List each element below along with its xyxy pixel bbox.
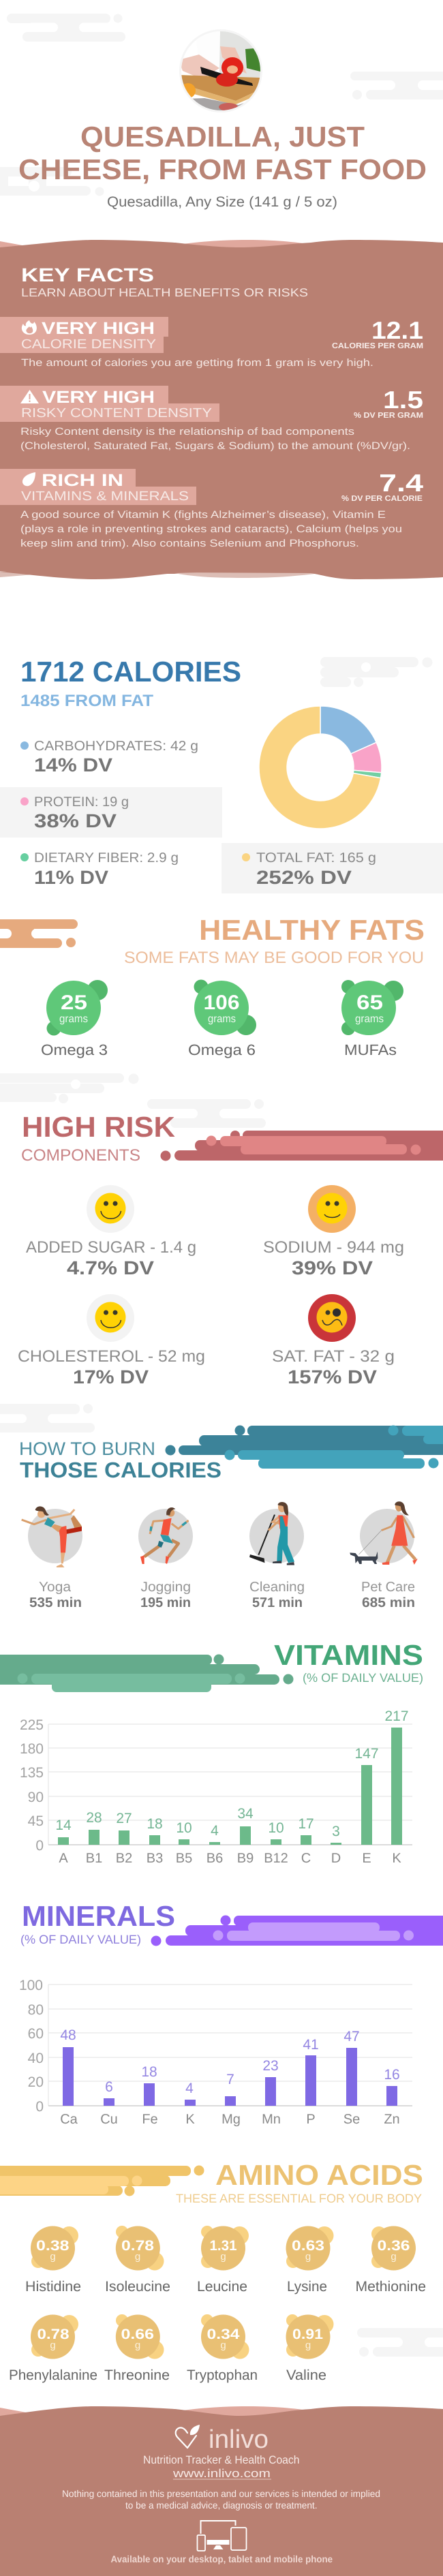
risk: sodium: SODIUM - 944 mg <box>263 1238 404 1257</box>
fat: MUFAs <box>341 980 403 1058</box>
bar chart: minerals: P <box>306 2112 316 2127</box>
amino: valine: Valine <box>286 2367 326 2383</box>
fact: calorie density: VERY HIGH <box>42 319 155 338</box>
bar chart: vitamins: 27 <box>116 1811 132 1826</box>
amino: methionine: Methionine <box>356 2279 426 2295</box>
bar chart: vitamins: 0 <box>35 1838 44 1854</box>
bar chart: vitamins: B6 <box>207 1851 223 1866</box>
panel: key facts <box>0 240 443 579</box>
disclaimer <box>62 2488 380 2511</box>
panel: high risk components <box>18 1111 443 1387</box>
risk: saturated fat <box>272 1294 395 1387</box>
heading: calories: 1712 CALORIES <box>20 656 241 688</box>
risk: added sugar: ADDED SUGAR - 1.4 g <box>26 1238 196 1257</box>
bar chart: minerals: Cu <box>100 2112 118 2127</box>
bar chart: minerals: 4 <box>185 2081 194 2096</box>
amino: isoleucine <box>105 2226 170 2295</box>
fact: rich in vitamins and minerals: % DV PER CALORIE <box>341 495 423 503</box>
amino: leucine: 1.31 <box>210 2238 237 2254</box>
risk: sodium: 39% DV <box>292 1257 373 1278</box>
legend: protein: PROTEIN: 19 g <box>34 795 129 810</box>
activity: yoga: Yoga <box>39 1580 72 1595</box>
fat: MUFAs: MUFAs <box>344 1041 397 1058</box>
heading: high risk: HIGH RISK <box>22 1111 175 1143</box>
heading: vitamins: (% OF DAILY VALUE) <box>303 1671 423 1685</box>
fat: omega 6: grams <box>208 1013 236 1025</box>
fat: MUFAs: grams <box>355 1013 384 1025</box>
bar chart: minerals: 40 <box>28 2051 44 2066</box>
heading: vitamins <box>274 1639 423 1685</box>
bar chart: minerals: 7 <box>226 2072 234 2087</box>
bar chart: minerals: Se <box>343 2112 360 2127</box>
bar chart: minerals: 48 <box>60 2027 76 2043</box>
fact: calorie density: CALORIE DENSITY <box>21 337 156 352</box>
bar chart: vitamins: 14 <box>55 1818 72 1833</box>
activity: yoga: 535 min <box>29 1595 82 1610</box>
risk: saturated fat: 157% DV <box>288 1366 377 1387</box>
bar chart: vitamins: B1 <box>86 1851 102 1866</box>
fact: rich in vitamins and minerals: A good source of Vitamin K (fights Alzheimer’s disease), Vitamin E <box>20 509 386 521</box>
heading: minerals: MINERALS <box>22 1900 175 1932</box>
fact: calorie density <box>0 316 423 369</box>
bar chart: minerals <box>19 1978 412 2127</box>
legend: carbohydrates: 14% DV <box>34 754 112 776</box>
bar chart: minerals: K <box>185 2112 195 2127</box>
risk: added sugar <box>26 1185 196 1278</box>
bar chart: vitamins: 10 <box>268 1820 284 1836</box>
activity: cleaning <box>249 1502 305 1610</box>
bar chart: vitamins <box>20 1708 412 1866</box>
bar chart: minerals: Mn <box>262 2112 281 2127</box>
fact: risky content density <box>0 386 423 452</box>
bar chart: minerals: 20 <box>28 2074 44 2090</box>
bar chart: minerals: 47 <box>343 2029 360 2044</box>
amino: lysine: Lysine <box>287 2279 327 2295</box>
legend: carbohydrates <box>20 739 198 776</box>
donut chart <box>259 706 382 829</box>
bar chart: vitamins: 135 <box>20 1765 44 1781</box>
amino: tryptophan: 0.34 <box>207 2327 240 2342</box>
activity: pet care <box>350 1501 418 1610</box>
legend: protein <box>20 795 129 831</box>
bar chart: vitamins: D <box>331 1851 341 1866</box>
bar chart: minerals: 18 <box>141 2064 157 2080</box>
fact: rich in vitamins and minerals: 7.4 <box>379 469 423 497</box>
heading: burn calories: HOW TO BURN <box>19 1439 155 1459</box>
bar chart: vitamins: K <box>392 1851 401 1866</box>
amino: leucine: g <box>220 2251 226 2263</box>
legend: total fat <box>242 850 376 888</box>
header: photo, title and serving size <box>18 27 427 210</box>
risk: cholesterol: CHOLESTEROL - 52 mg <box>18 1347 205 1366</box>
bar chart: vitamins: 90 <box>28 1790 44 1805</box>
amino: valine <box>286 2314 334 2383</box>
amino: methionine: g <box>391 2251 397 2263</box>
fat: omega 3: grams <box>59 1013 88 1025</box>
heading: healthy fats: SOME FATS MAY BE GOOD FOR YOU <box>124 949 424 967</box>
legend: carbohydrates: CARBOHYDRATES: 42 g <box>34 739 198 754</box>
icon: flame <box>22 320 37 335</box>
icon: leaf <box>22 472 35 486</box>
amino: histidine <box>25 2226 81 2295</box>
fact: calorie density: CALORIES PER GRAM <box>332 342 423 350</box>
activity: pet care: Pet Care <box>361 1580 415 1595</box>
amino: valine: g <box>305 2340 311 2351</box>
bar chart: minerals: 6 <box>105 2079 113 2095</box>
website link: www.inlivo.com <box>172 2467 271 2480</box>
fat: MUFAs: 65 <box>356 992 383 1014</box>
fat: omega 3 <box>41 980 108 1058</box>
amino: histidine: g <box>50 2251 56 2263</box>
heading: healthy fats <box>124 914 425 967</box>
logo: inlivo: inlivo <box>209 2425 269 2454</box>
amino: phenylalanine: 0.78 <box>37 2327 70 2342</box>
disclaimer: to be a medical advice, diagnosis or treatment. <box>125 2500 318 2511</box>
legend: protein: 38% DV <box>34 810 117 831</box>
panel: amino acids <box>0 2159 426 2383</box>
bar chart: vitamins: B2 <box>116 1851 132 1866</box>
bar chart: minerals: Fe <box>142 2112 158 2127</box>
fact: rich in vitamins and minerals <box>0 469 423 549</box>
bar chart: vitamins: 225 <box>20 1717 44 1733</box>
icon: desktop, tablet and phone <box>198 2521 247 2551</box>
logo: inlivo <box>176 2425 269 2454</box>
bar chart: vitamins: 4 <box>211 1823 219 1839</box>
bar chart: minerals: Zn <box>384 2112 400 2127</box>
bar chart: vitamins: B3 <box>147 1851 163 1866</box>
bar chart: vitamins: A <box>59 1851 68 1866</box>
amino: isoleucine: Isoleucine <box>105 2279 170 2295</box>
fact: calorie density: 12.1 <box>371 316 423 344</box>
bar chart: minerals: 23 <box>262 2058 279 2074</box>
bar chart: vitamins: 10 <box>176 1820 192 1836</box>
fact: risky content density: (Cholesterol, Saturated Fat, Sugars & Sodium) to the amount (%DV/gr). <box>20 440 410 452</box>
heading: high risk <box>21 1111 175 1165</box>
fact: calorie density: The amount of calories you are getting from 1 gram is very high. <box>21 357 373 369</box>
amino: phenylalanine: Phenylalanine <box>9 2367 97 2383</box>
title <box>18 121 427 185</box>
heading: key facts <box>21 264 308 299</box>
amino: tryptophan: Tryptophan <box>187 2367 258 2383</box>
bar chart: minerals: 16 <box>384 2067 400 2083</box>
heading: calories: 1485 FROM FAT <box>20 692 153 710</box>
bar chart: minerals: 60 <box>28 2026 44 2042</box>
heading: burn calories <box>19 1439 222 1482</box>
bar chart: vitamins: B5 <box>176 1851 192 1866</box>
heading: minerals: (% OF DAILY VALUE) <box>20 1933 141 1946</box>
activity: yoga <box>22 1506 82 1610</box>
disclaimer: Nothing contained in this presentation and our services is intended or implied <box>62 2488 380 2499</box>
bar chart: vitamins: 17 <box>298 1816 314 1832</box>
heading: minerals <box>20 1900 175 1946</box>
panel: how to burn those calories <box>19 1426 443 1610</box>
bar chart: vitamins: 28 <box>86 1810 102 1826</box>
heading: burn calories: THOSE CALORIES <box>20 1458 222 1482</box>
footer panel <box>0 2406 443 2576</box>
amino: phenylalanine <box>9 2314 97 2383</box>
risk: sodium <box>263 1185 404 1278</box>
activity: cleaning: Cleaning <box>249 1580 305 1595</box>
fact: rich in vitamins and minerals: RICH IN <box>42 471 123 490</box>
risk: added sugar: 4.7% DV <box>67 1257 154 1278</box>
activity: pet care: 685 min <box>362 1595 415 1610</box>
amino: leucine <box>197 2226 249 2295</box>
fat: omega 6 <box>188 980 256 1058</box>
fact: risky content density: VERY HIGH <box>42 388 155 407</box>
panel: minerals <box>19 1900 443 2127</box>
amino: threonine: g <box>135 2340 140 2351</box>
bar chart: minerals: 0 <box>35 2099 44 2115</box>
legend: dietary fiber <box>20 850 179 888</box>
availability note: Available on your desktop, tablet and mobile phone <box>110 2554 333 2564</box>
activity: jogging: 195 min <box>140 1595 191 1610</box>
panel: calories <box>0 656 443 893</box>
heading: calories <box>20 656 241 710</box>
amino: lysine: 0.63 <box>292 2238 324 2254</box>
legend: total fat: 252% DV <box>256 867 352 888</box>
bar chart: vitamins: 3 <box>332 1824 340 1839</box>
heading: high risk: COMPONENTS <box>21 1146 140 1165</box>
amino: valine: 0.91 <box>292 2327 323 2342</box>
amino: threonine: Threonine <box>104 2367 170 2383</box>
amino: histidine: 0.38 <box>36 2238 70 2254</box>
amino: methionine: 0.36 <box>378 2238 410 2254</box>
fat: omega 3: 25 <box>61 992 87 1014</box>
photo: hands slicing a red pepper <box>179 29 262 112</box>
title: QUESADILLA, JUST <box>80 121 365 153</box>
bar chart: vitamins: B12 <box>264 1851 288 1866</box>
bar chart: minerals: 41 <box>303 2037 319 2053</box>
amino: phenylalanine: g <box>50 2340 56 2351</box>
amino: threonine: 0.66 <box>121 2327 154 2342</box>
legend: dietary fiber: DIETARY FIBER: 2.9 g <box>34 850 179 865</box>
heading: key facts: KEY FACTS <box>21 264 154 286</box>
bar chart: vitamins: E <box>362 1851 371 1866</box>
amino: tryptophan: g <box>220 2340 226 2351</box>
bar chart: vitamins: C <box>301 1851 311 1866</box>
fact: risky content density: Risky Content density is the relationship of bad components <box>20 426 354 438</box>
fact: risky content density: % DV PER GRAM <box>354 412 423 420</box>
amino: leucine: Leucine <box>197 2279 247 2295</box>
amino: threonine <box>104 2314 170 2383</box>
bar chart: minerals: Mg <box>222 2112 241 2127</box>
risk: saturated fat: SAT. FAT - 32 g <box>272 1347 395 1366</box>
fact: rich in vitamins and minerals: VITAMINS & MINERALS <box>21 489 189 504</box>
amino: lysine: g <box>305 2251 311 2263</box>
amino: isoleucine: 0.78 <box>121 2238 154 2254</box>
bar chart: vitamins: 18 <box>147 1816 163 1832</box>
bar chart: vitamins: 180 <box>20 1741 44 1757</box>
icon: warning triangle <box>20 390 39 403</box>
bar chart: vitamins: 217 <box>384 1708 409 1724</box>
fact: risky content density: RISKY CONTENT DENSITY <box>21 406 212 420</box>
amino: histidine: Histidine <box>25 2279 81 2295</box>
bar chart: vitamins: B9 <box>237 1851 254 1866</box>
amino: methionine <box>356 2226 426 2295</box>
legend: total fat: TOTAL FAT: 165 g <box>256 850 376 865</box>
bar chart: vitamins: 147 <box>354 1746 379 1762</box>
heading: amino acids: THESE ARE ESSENTIAL FOR YOUR BODY <box>176 2192 422 2205</box>
fact: rich in vitamins and minerals: (plays a role in preventing strokes and cataracts), Calcium (helps you <box>20 523 402 535</box>
heading: vitamins: VITAMINS <box>274 1639 423 1671</box>
panel: vitamins <box>0 1639 423 1866</box>
heading: amino acids <box>176 2159 423 2205</box>
panel: healthy fats <box>0 914 425 1058</box>
bar chart: vitamins: 34 <box>237 1806 254 1822</box>
fact: rich in vitamins and minerals: keep slim and trim). Also contains Selenium and Phosphorus. <box>20 538 359 549</box>
fact: risky content density: 1.5 <box>383 386 423 414</box>
tagline: Nutrition Tracker & Health Coach <box>143 2454 300 2466</box>
bar chart: minerals: 80 <box>28 2002 44 2018</box>
title: CHEESE, FROM FAST FOOD <box>18 153 427 185</box>
heading: amino acids: AMINO ACIDS <box>215 2159 423 2191</box>
amino: isoleucine: g <box>135 2251 140 2263</box>
bar chart: minerals: 100 <box>19 1978 43 1993</box>
heading: key facts: LEARN ABOUT HEALTH BENEFITS OR RISKS <box>21 286 308 299</box>
risk: cholesterol: 17% DV <box>73 1366 149 1387</box>
activity: cleaning: 571 min <box>252 1595 303 1610</box>
heading: healthy fats: HEALTHY FATS <box>199 914 425 946</box>
fat: omega 3: Omega 3 <box>41 1041 108 1058</box>
fat: omega 6: 106 <box>203 992 240 1014</box>
bar chart: minerals: Ca <box>60 2112 78 2127</box>
serving size: Quesadilla, Any Size (141 g / 5 oz) <box>107 194 337 210</box>
risk: cholesterol <box>18 1294 205 1387</box>
activity: jogging <box>138 1507 193 1610</box>
legend: dietary fiber: 11% DV <box>34 867 108 888</box>
amino: lysine <box>286 2226 334 2295</box>
fat: omega 6: Omega 6 <box>188 1041 256 1058</box>
activity: jogging: Jogging <box>140 1580 191 1595</box>
bar chart: vitamins: 45 <box>28 1813 44 1829</box>
amino: tryptophan <box>187 2314 258 2383</box>
